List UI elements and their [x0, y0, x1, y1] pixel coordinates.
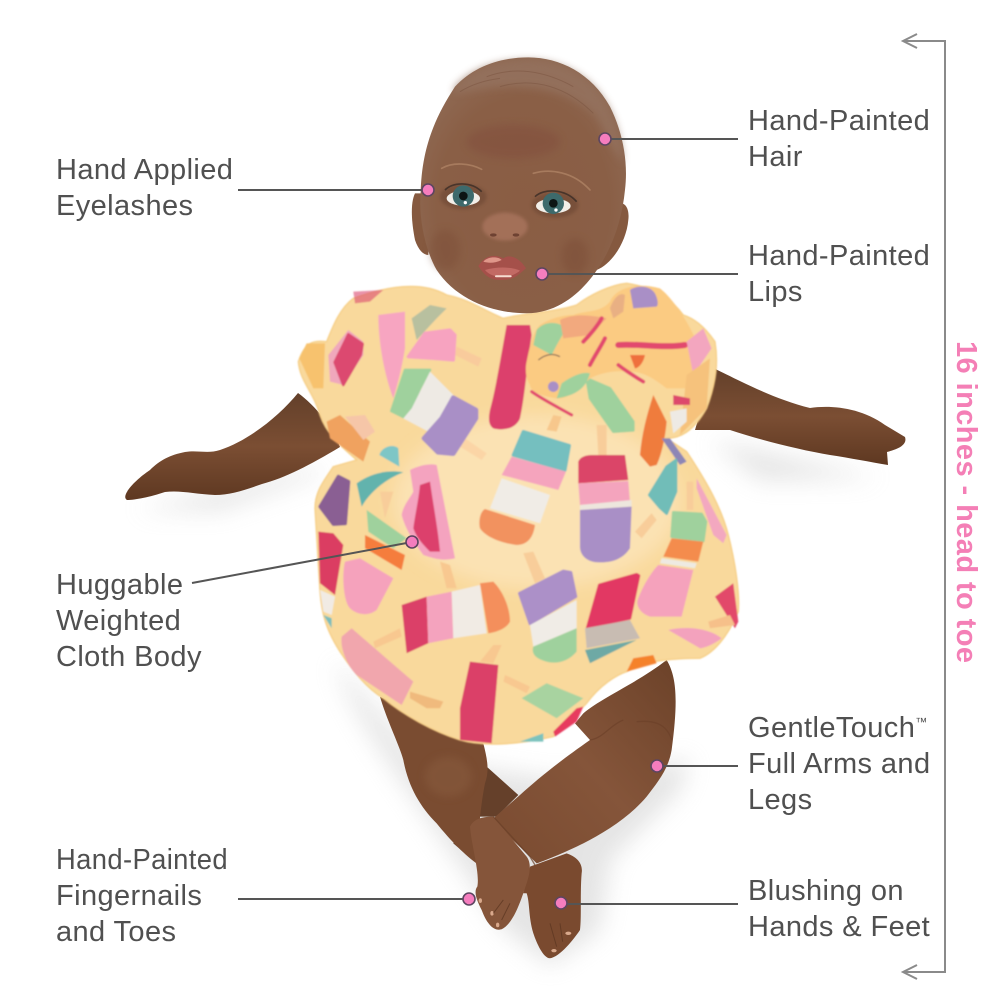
right sleeve [640, 328, 712, 467]
bow [526, 286, 697, 432]
popsicle: red pink white purple [578, 425, 632, 562]
callout: hand-painted fingernails and toes: Fingernails [56, 880, 202, 912]
height bracket arrow [903, 34, 945, 979]
legs [380, 660, 676, 958]
left sleeve [299, 290, 447, 462]
far foot [523, 853, 582, 958]
callout: gentletouch full arms and legs: GentleTouch [748, 712, 915, 744]
popsicle: teal pink white orange [479, 415, 569, 545]
callout: hand-painted lips [536, 240, 930, 308]
callout: hand-painted hair: Hair [748, 141, 803, 173]
callout: hand-painted lips: Hand-Painted [748, 240, 930, 272]
left eye [445, 184, 482, 207]
popsicle: purple white green [519, 552, 577, 663]
left body prints [318, 446, 455, 628]
popsicle: pink top [408, 330, 482, 367]
dress [298, 283, 739, 744]
callout: gentletouch full arms and legs: ™ [915, 715, 928, 729]
callout: hand-painted hair [599, 105, 930, 173]
popsicle: red pink white orange horizontal [373, 562, 510, 653]
left arm [125, 393, 340, 500]
callout: gentletouch full arms and legs [651, 712, 930, 816]
nose [482, 213, 528, 241]
painted hair [453, 60, 623, 163]
callout: hand applied eyelashes: Hand Applied [56, 154, 233, 186]
callout: hand-painted fingernails and toes [56, 844, 475, 948]
callout: blushing on hands and feet: Blushing on [748, 875, 904, 907]
right eye [535, 191, 577, 214]
callout: gentletouch full arms and legs: Full Arms and [748, 748, 930, 780]
toes [479, 898, 571, 952]
callout: huggable weighted cloth body: Huggable [56, 569, 183, 601]
popsicle: green orange pink right [637, 482, 706, 617]
popsicle: long red [489, 325, 532, 429]
lips [478, 256, 526, 280]
callout: blushing on hands and feet: Hands & Feet [748, 911, 930, 943]
callout: hand-painted fingernails and toes: and Toes [56, 916, 176, 948]
height label: 16 inches - head to toe [950, 341, 982, 663]
right leg [492, 660, 676, 863]
eye socket shading [440, 184, 578, 218]
forehead blush [467, 125, 560, 158]
callout: hand-painted fingernails and toes: Hand-Painted [56, 844, 228, 876]
callout: hand applied eyelashes [56, 154, 434, 222]
callout: hand-painted lips: Lips [748, 276, 803, 308]
callout: huggable weighted cloth body: Weighted [56, 605, 181, 637]
popsicle: teal right [635, 460, 727, 543]
callout: huggable weighted cloth body [56, 536, 418, 673]
near foot [470, 817, 530, 930]
callout: gentletouch full arms and legs: Legs [748, 784, 812, 816]
popsicle: green white purple [391, 370, 487, 460]
callout: blushing on hands and feet [555, 875, 930, 943]
face [420, 57, 626, 313]
head [412, 57, 629, 313]
ears [412, 193, 430, 255]
left thigh [380, 697, 488, 863]
callout: huggable weighted cloth body: Cloth Body [56, 641, 202, 673]
cheek shading [430, 230, 460, 270]
dress shape [298, 283, 739, 744]
doll illustration [125, 57, 905, 965]
soft shadows [135, 440, 880, 965]
popsicle: red lower right [585, 574, 738, 672]
bottom hem prints [341, 628, 583, 743]
right arm [695, 368, 905, 465]
hair strokes [460, 71, 593, 113]
eyebrows [442, 164, 590, 190]
far shin [453, 760, 518, 863]
callout: hand-painted hair: Hand-Painted [748, 105, 930, 137]
callout: hand applied eyelashes: Eyelashes [56, 190, 193, 222]
